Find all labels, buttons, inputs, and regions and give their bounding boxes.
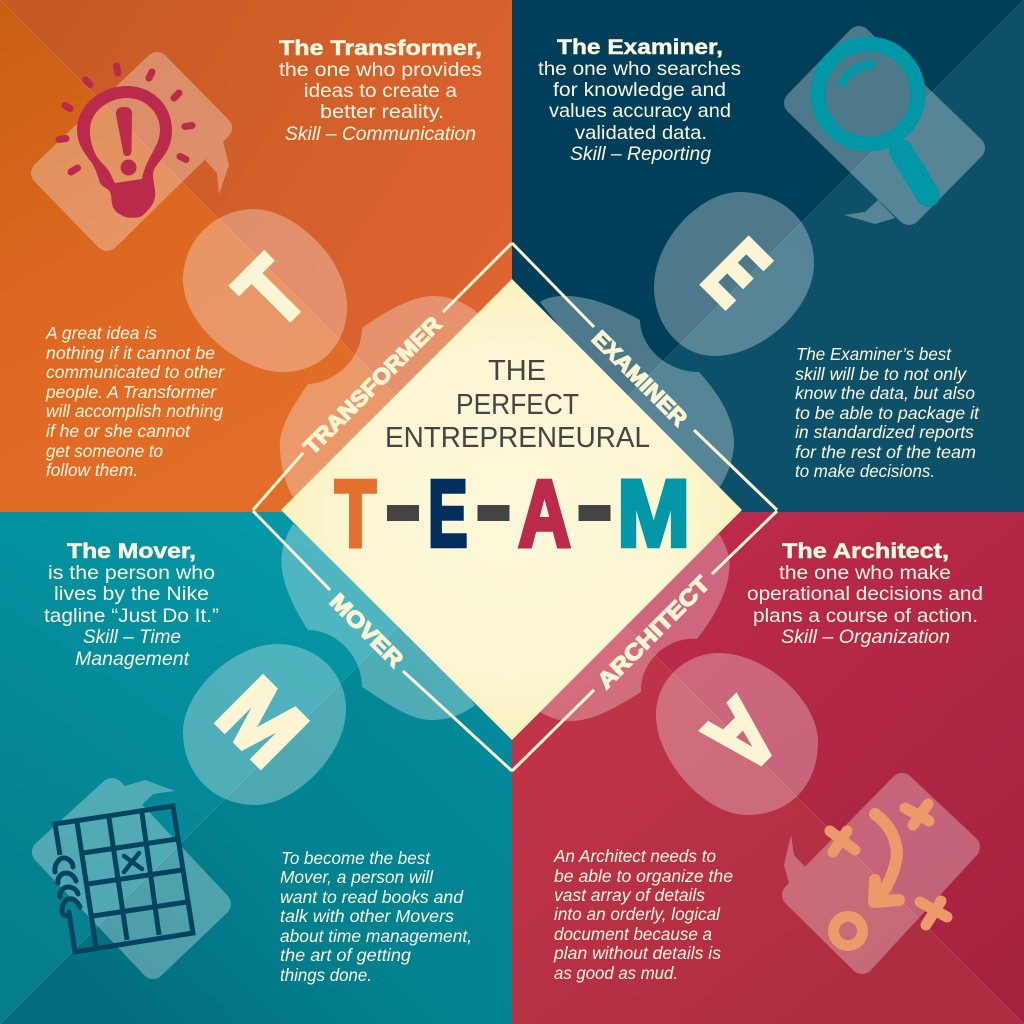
text block: Architect description: be able to organize the <box>554 866 733 886</box>
letter E: E <box>684 221 788 325</box>
letter bubble: M <box>183 644 346 805</box>
text block: Architect description <box>553 846 733 983</box>
speech bubble: Transformer <box>43 64 229 239</box>
panel: Architect quadrant <box>512 511 1024 1024</box>
text block: Architect description: plan without details is <box>553 943 721 963</box>
heading: The Examiner: the one who searches <box>538 58 741 80</box>
text block: Transformer description: will accomplish nothing <box>46 401 223 421</box>
title: The Perfect Entrepreneural: PERFECT <box>456 389 579 421</box>
label: MOVER: MOVER <box>325 589 408 672</box>
text block: Examiner description <box>795 344 980 481</box>
center diamond with title <box>281 279 742 740</box>
title: T-E-A-M: M <box>617 461 690 567</box>
heading: The Architect <box>747 540 983 648</box>
text block: Transformer description: nothing if it cannot be <box>46 343 215 363</box>
title: T-E-A-M: E <box>428 461 468 567</box>
heading: The Mover <box>44 540 219 670</box>
heading: The Transformer: The Transformer, <box>279 37 482 60</box>
text block: Architect description: as good as mud. <box>554 963 678 983</box>
text block: Examiner description: for the rest of the team <box>795 442 976 462</box>
heading: The Examiner: validated data. <box>575 122 707 144</box>
central blob: Transformer <box>280 296 480 500</box>
central blob: Architect <box>540 534 730 721</box>
text block: Transformer description: if he or she cannot <box>46 421 191 441</box>
text block: Examiner description: The Examiner’s best <box>796 344 952 364</box>
heading: The Examiner: for knowledge and <box>553 79 726 101</box>
panel: Mover quadrant <box>0 511 512 1024</box>
text block: Transformer description <box>45 323 225 480</box>
central blob: Mover <box>281 524 475 720</box>
speech bubble: Mover <box>44 780 219 967</box>
heading: The Transformer: better reality. <box>320 101 444 123</box>
text block: Architect description: document because a <box>554 924 712 944</box>
text block: Mover description: about time management, <box>280 926 472 946</box>
heading: The Mover: is the person who <box>48 562 215 584</box>
icon: magnifying glass <box>818 44 928 195</box>
heading: The Mover: lives by the Nike <box>54 583 209 605</box>
heading: The Mover: Management <box>75 648 191 670</box>
central blob: Examiner <box>540 296 734 487</box>
title: The Perfect Entrepreneural <box>385 355 650 454</box>
title: T-E-A-M: T <box>335 461 376 567</box>
text block: Transformer description: A great idea is <box>45 323 157 343</box>
text block: Mover description: things done. <box>280 965 372 985</box>
heading: The Transformer: Skill – Communication <box>285 123 476 145</box>
letter A: A <box>685 680 798 792</box>
heading: The Architect: operational decisions and <box>747 583 983 605</box>
text block: Architect description: vast array of details <box>554 885 705 905</box>
speech bubble: Examiner <box>796 38 973 224</box>
text block: Examiner description: skill will be to not only <box>795 364 967 384</box>
text block: Mover description: Mover, a person will <box>280 867 434 887</box>
icon: notebook calendar <box>55 806 193 952</box>
text block: Transformer description: get someone to <box>46 441 163 461</box>
text block: Mover description: talk with other Movers <box>280 906 454 926</box>
label: TRANSFORMER: TRANSFORMER <box>298 311 446 459</box>
panel: Transformer quadrant <box>0 0 512 512</box>
text block: Examiner description: to make decisions. <box>795 461 935 481</box>
text block: Architect description: An Architect needs to <box>553 846 716 866</box>
letter M: M <box>198 659 325 786</box>
text block: Transformer description: communicated to other <box>46 362 225 382</box>
letter bubble: A <box>656 653 818 815</box>
text block: Architect description: into an orderly, logical <box>554 904 721 924</box>
heading: The Transformer <box>279 37 482 145</box>
title: The Perfect Entrepreneural: THE <box>488 355 546 387</box>
letter bubble: E <box>654 192 814 356</box>
title: T-E-A-M: A <box>518 461 571 567</box>
text block: Mover description: want to read books and <box>280 887 464 907</box>
text block: Transformer description: people. A Transformer <box>45 382 217 402</box>
text block: Mover description: To become the best <box>281 848 431 868</box>
heading: The Mover: The Mover, <box>67 540 196 563</box>
text block: Transformer description: follow them. <box>46 460 138 480</box>
text block: Mover description: the art of getting <box>280 945 411 965</box>
heading: The Transformer: the one who provides <box>279 59 482 81</box>
text block: Mover description <box>280 848 472 985</box>
icon: lightbulb with exclamation mark <box>59 66 192 218</box>
heading: The Examiner: Skill – Reporting <box>570 143 711 165</box>
heading: The Architect: Skill – Organization <box>781 626 950 648</box>
heading: The Architect: the one who make <box>779 562 951 584</box>
label: ARCHITECT: ARCHITECT <box>592 571 715 694</box>
text block: Examiner description: know the data, but also <box>795 383 975 403</box>
letter T: T <box>217 238 326 348</box>
heading: The Examiner <box>538 36 741 165</box>
title: T-E-A-M <box>335 461 690 567</box>
heading: The Architect: plans a course of action. <box>753 605 978 627</box>
heading: The Examiner: The Examiner, <box>557 36 723 59</box>
heading: The Mover: Skill – Time <box>83 626 181 648</box>
heading: The Architect: The Architect, <box>782 540 949 563</box>
icon: game plan arrow with crosses and circle <box>830 804 947 946</box>
title: The Perfect Entrepreneural: ENTREPRENEURAL <box>385 422 650 454</box>
heading: The Transformer: ideas to create a <box>304 80 457 102</box>
panel: Examiner quadrant <box>512 0 1024 512</box>
speech bubble: Architect <box>784 785 968 962</box>
letter bubble: T <box>183 209 347 372</box>
heading: The Mover: tagline “Just Do It.” <box>44 605 219 627</box>
text block: Examiner description: to be able to package it <box>795 403 980 423</box>
label: EXAMINER: EXAMINER <box>587 326 692 431</box>
text block: Examiner description: in standardized reports <box>795 422 974 442</box>
heading: The Examiner: values accuracy and <box>549 100 731 122</box>
